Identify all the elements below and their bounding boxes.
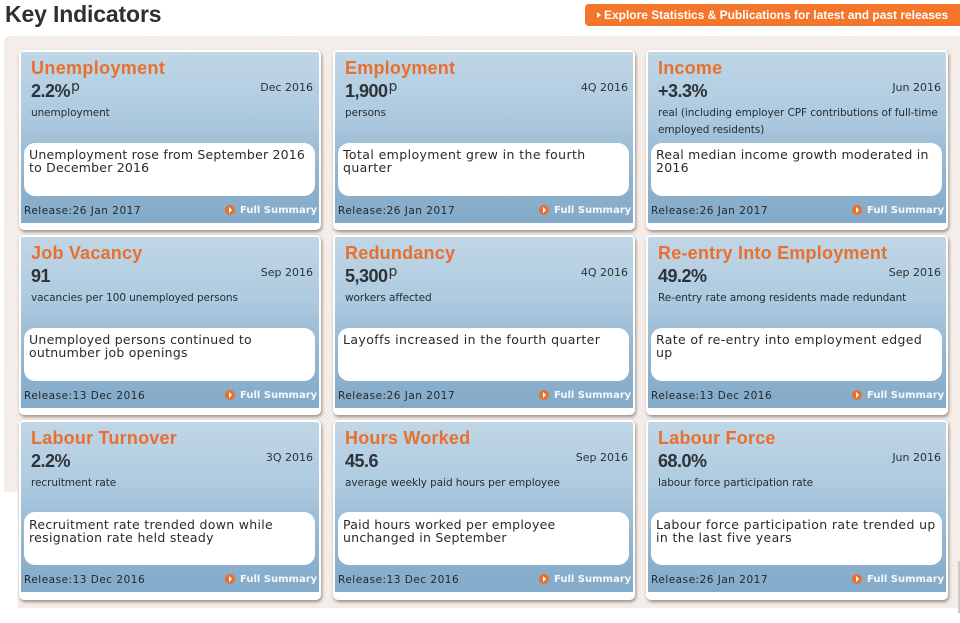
panel: job vacancy: vacancies per 100 unemployed persons bbox=[31, 292, 238, 304]
panel: re-entry into employment: up bbox=[656, 345, 673, 360]
panel: employment: 1,900p bbox=[345, 79, 397, 101]
panel: re-entry into employment: 49.2% bbox=[658, 266, 707, 286]
panel: labour turnover: recruitment rate bbox=[31, 476, 116, 488]
panel: labour turnover: Full Summary bbox=[240, 574, 317, 585]
panel: labour force: labour force participation rate bbox=[658, 476, 813, 488]
panel: redundancy: Layoffs increased in the fourth quarter bbox=[343, 332, 600, 347]
panel: re-entry into employment: Release:13 Dec 2016 bbox=[651, 390, 772, 402]
panel: employment bbox=[333, 50, 635, 230]
panel: labour turnover: Release:13 Dec 2016 bbox=[24, 574, 145, 586]
panel: labour force: Release:26 Jan 2017 bbox=[651, 574, 768, 586]
panel: employment: Total employment grew in the fourth bbox=[343, 147, 586, 162]
panel: job vacancy: Release:13 Dec 2016 bbox=[24, 390, 145, 402]
panel: labour force: in the last five years bbox=[656, 530, 792, 545]
panel: employment: Full Summary bbox=[554, 205, 631, 216]
panel: job vacancy: Job Vacancy bbox=[31, 243, 142, 263]
panel: unemployment bbox=[19, 50, 321, 230]
panel: labour force: Full Summary bbox=[867, 574, 944, 585]
panel: redundancy bbox=[333, 235, 635, 415]
panel: hours worked: unchanged in September bbox=[343, 530, 507, 545]
panel: labour turnover: 2.2% bbox=[31, 451, 70, 471]
panel: employment: Release:26 Jan 2017 bbox=[338, 205, 455, 217]
panel: redundancy: workers affected bbox=[345, 292, 432, 304]
panel: labour turnover: resignation rate held steady bbox=[29, 530, 214, 545]
panel: income: real (including employer CPF contributions of full-time employed residents) bbox=[658, 106, 938, 136]
panel: income: Release:26 Jan 2017 bbox=[651, 205, 768, 217]
panel: income: Real median income growth moderated in bbox=[656, 147, 929, 162]
panel: employment: quarter bbox=[343, 160, 392, 175]
panel: job vacancy bbox=[19, 235, 321, 415]
panel: re-entry into employment: Re-entry Into Employment bbox=[658, 243, 887, 263]
panel: labour force: Labour force participation rate trended up bbox=[656, 517, 936, 532]
panel: redundancy: Redundancy bbox=[345, 243, 455, 263]
panel: labour turnover: Recruitment rate trended down while bbox=[29, 517, 273, 532]
panel: labour force bbox=[646, 420, 948, 600]
panel: unemployment: 2.2%p bbox=[31, 79, 79, 101]
panel: unemployment: to December 2016 bbox=[29, 160, 149, 175]
panel: income: Jun 2016 bbox=[892, 81, 941, 94]
panel: income: Full Summary bbox=[867, 205, 944, 216]
button: explore statistics bbox=[585, 4, 960, 26]
title: Key Indicators bbox=[5, 1, 161, 27]
panel: re-entry into employment: Re-entry rate among residents made redundant bbox=[658, 292, 906, 304]
panel: redundancy: Full Summary bbox=[554, 390, 631, 401]
panel: redundancy: 5,300p bbox=[345, 264, 397, 286]
panel: unemployment: Full Summary bbox=[240, 205, 317, 216]
panel: employment: 4Q 2016 bbox=[581, 81, 628, 94]
button: explore statistics: Explore Statistics & Publications for latest and past releases bbox=[604, 8, 948, 22]
panel: re-entry into employment bbox=[646, 235, 948, 415]
panel: unemployment: Release:26 Jan 2017 bbox=[24, 205, 141, 217]
panel: job vacancy: Sep 2016 bbox=[261, 266, 313, 279]
panel: unemployment: Unemployment bbox=[31, 58, 165, 78]
panel: job vacancy: outnumber job openings bbox=[29, 345, 188, 360]
panel: income bbox=[646, 50, 948, 230]
panel: redundancy: 4Q 2016 bbox=[581, 266, 628, 279]
panel: income: 2016 bbox=[656, 160, 689, 175]
panel: hours worked: Full Summary bbox=[554, 574, 631, 585]
panel: labour force: Labour Force bbox=[658, 428, 776, 448]
panel: hours worked: 45.6 bbox=[345, 451, 378, 471]
panel: hours worked: Paid hours worked per employee bbox=[343, 517, 555, 532]
panel: job vacancy: Unemployed persons continued to bbox=[29, 332, 252, 347]
panel: hours worked: Release:13 Dec 2016 bbox=[338, 574, 459, 586]
panel: income: +3.3% bbox=[658, 81, 707, 101]
panel: re-entry into employment: Rate of re-entry into employment edged bbox=[656, 332, 922, 347]
panel: redundancy: Release:26 Jan 2017 bbox=[338, 390, 455, 402]
panel: hours worked: average weekly paid hours per employee bbox=[345, 476, 560, 488]
panel: job vacancy: Full Summary bbox=[240, 390, 317, 401]
panel: re-entry into employment: Sep 2016 bbox=[889, 266, 941, 279]
panel: hours worked: Sep 2016 bbox=[576, 451, 628, 464]
panel: employment: Employment bbox=[345, 58, 455, 78]
panel: employment: persons bbox=[345, 106, 386, 118]
panel: labour turnover bbox=[19, 420, 321, 600]
panel: labour turnover: Labour Turnover bbox=[31, 428, 177, 448]
panel: labour force: Jun 2016 bbox=[892, 451, 941, 464]
panel: hours worked: Hours Worked bbox=[345, 428, 470, 448]
panel: unemployment: unemployment bbox=[31, 106, 110, 118]
panel: hours worked bbox=[333, 420, 635, 600]
panel: re-entry into employment: Full Summary bbox=[867, 390, 944, 401]
panel: unemployment: Dec 2016 bbox=[260, 81, 313, 94]
panel: income: Income bbox=[658, 58, 722, 78]
panel: job vacancy: 91 bbox=[31, 266, 50, 286]
panel: labour turnover: 3Q 2016 bbox=[266, 451, 313, 464]
panel: unemployment: Unemployment rose from September 2016 bbox=[29, 147, 305, 162]
panel: labour force: 68.0% bbox=[658, 451, 707, 471]
